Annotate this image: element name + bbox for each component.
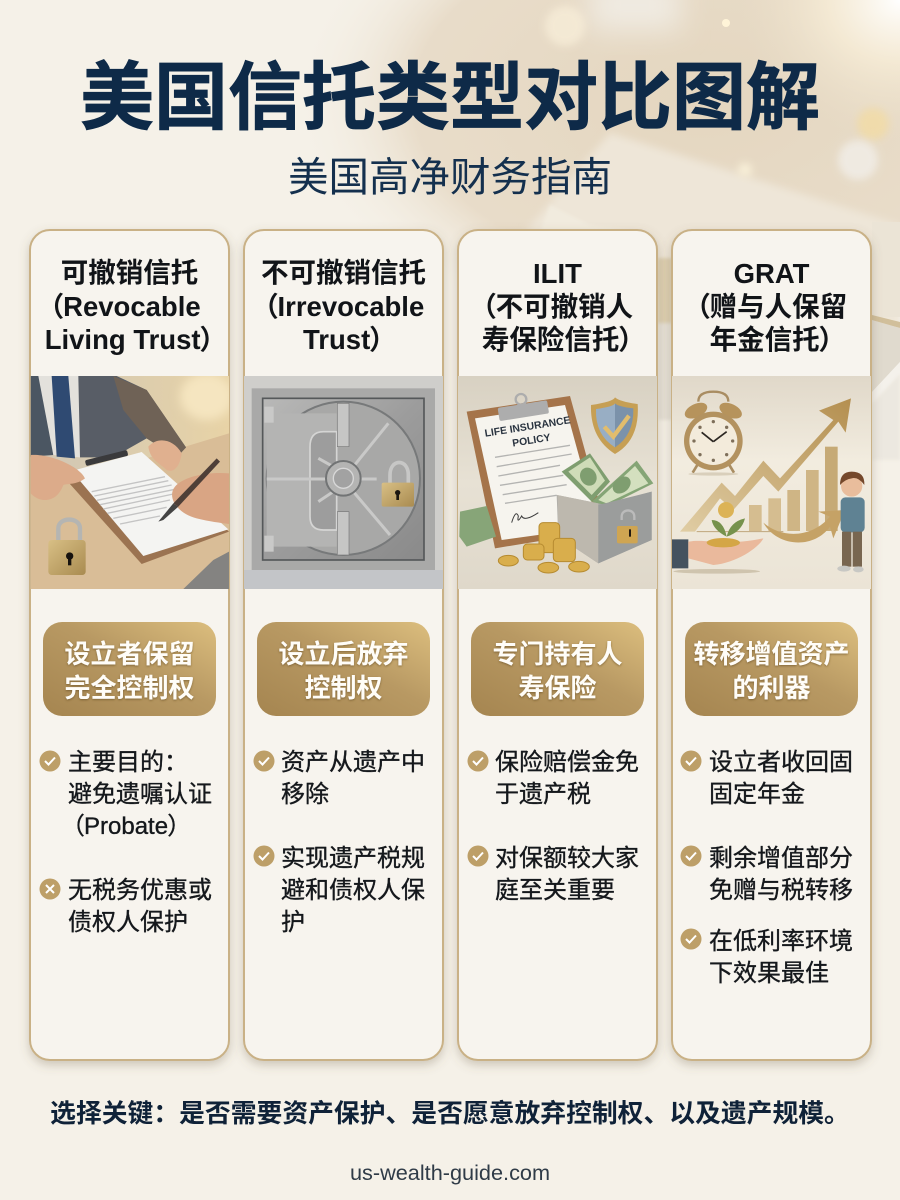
heading: ILIT: （不可撤销人 [482, 291, 633, 322]
callout: holds life insurance: 寿保险 [518, 673, 597, 703]
callout: appreciated assets: 的利器 [732, 673, 811, 703]
bullet: fixed annuity [680, 749, 853, 808]
bullet: estate tax avoidance: 避和债权人保 [281, 877, 425, 904]
heading: ILIT [482, 258, 633, 355]
bullet: payout estate tax free: 于遗产税 [495, 781, 591, 808]
bullet: payout estate tax free: 保险赔偿金免 [495, 749, 639, 776]
heading: revocable: Living Trust） [45, 324, 214, 355]
panel: irrevocable trust [244, 230, 443, 1060]
image: life insurance policy with cash box: POLICY [512, 433, 551, 450]
bullet: key for large policies: 对保额较大家 [495, 845, 639, 872]
image: life insurance policy with cash box: LIFE INSURANCE [484, 415, 571, 440]
bullet: estate tax avoidance: 实现遗产税规 [281, 845, 425, 872]
heading: GRAT [696, 258, 847, 355]
bullet: removed from estate [254, 749, 425, 808]
callout: retains full control: 完全控制权 [64, 673, 195, 703]
heading: irrevocable: （Irrevocable [264, 291, 424, 322]
panel: GRAT [672, 230, 871, 1060]
bullet: key for large policies [468, 845, 639, 904]
heading: revocable: 可撤销信托 [61, 257, 198, 288]
heading: GRAT: （赠与人保留 [696, 291, 847, 322]
heading: GRAT: 年金信托） [710, 324, 833, 355]
title: 美国信托类型对比图解 [80, 56, 820, 139]
heading: ILIT: ILIT [533, 258, 582, 289]
callout: gives up control [257, 622, 430, 716]
bullet: low interest [680, 928, 853, 987]
bullet: main purpose: （Probate） [72, 813, 180, 840]
bullet: no tax benefit: 债权人保护 [68, 909, 188, 936]
bullet: key for large policies: 庭至关重要 [495, 877, 615, 904]
heading: revocable: （Revocable [49, 291, 201, 322]
bullet: estate tax avoidance: 护 [281, 909, 305, 936]
callout: appreciated assets [685, 622, 858, 716]
callout: retains full control [43, 622, 216, 716]
bullet: estate tax avoidance [254, 845, 425, 936]
bullet: removed from estate: 移除 [281, 781, 329, 808]
bullet: no tax benefit [40, 877, 212, 936]
heading: irrevocable: 不可撤销信托 [261, 257, 426, 288]
heading: irrevocable: Trust） [303, 324, 384, 355]
panel: ILIT [458, 230, 657, 1060]
bullet: low interest: 下效果最佳 [709, 960, 829, 987]
image: clock, rising arrow, hand and child [672, 376, 871, 589]
subtitle: 美国高净财务指南 [288, 154, 612, 200]
bullet: main purpose: 避免遗嘱认证 [68, 781, 212, 808]
bullet: main purpose: 主要目的： [68, 749, 188, 776]
callout: holds life insurance: 专门持有人 [492, 639, 623, 669]
bullet: fixed annuity: 设立者收回固 [709, 749, 853, 776]
image: life insurance policy with cash box [458, 376, 657, 589]
heading: ILIT: 寿保险信托） [482, 324, 633, 355]
callout: gives up control: 控制权 [304, 673, 383, 703]
heading: GRAT: GRAT [734, 258, 810, 289]
bullet: low interest: 在低利率环境 [709, 928, 853, 955]
bullet: no tax benefit: 无税务优惠或 [68, 877, 212, 904]
image: signing document with padlock [31, 373, 233, 589]
bullet: remaining appreciation: 剩余增值部分 [709, 845, 853, 872]
bullet: remaining appreciation: 免赠与税转移 [709, 877, 853, 904]
bullet: remaining appreciation [680, 845, 853, 904]
bullet: removed from estate: 资产从遗产中 [281, 749, 425, 776]
takeaway: 选择关键：是否需要资产保护、是否愿意放弃控制权、以及遗产规模。 [50, 1099, 850, 1128]
panel: revocable living trust [30, 230, 233, 1060]
heading: irrevocable [261, 257, 426, 355]
bullet: payout estate tax free [468, 749, 639, 808]
image: bank vault door with padlock [244, 376, 443, 589]
callout: holds life insurance [471, 622, 644, 716]
bullet: main purpose [40, 749, 212, 840]
callout: retains full control: 设立者保留 [64, 639, 195, 669]
callout: appreciated assets: 转移增值资产 [693, 639, 850, 669]
source url: us-wealth-guide.com [350, 1160, 550, 1185]
bullet: fixed annuity: 固定年金 [709, 781, 805, 808]
heading: revocable [45, 257, 214, 355]
callout: gives up control: 设立后放弃 [278, 639, 409, 669]
